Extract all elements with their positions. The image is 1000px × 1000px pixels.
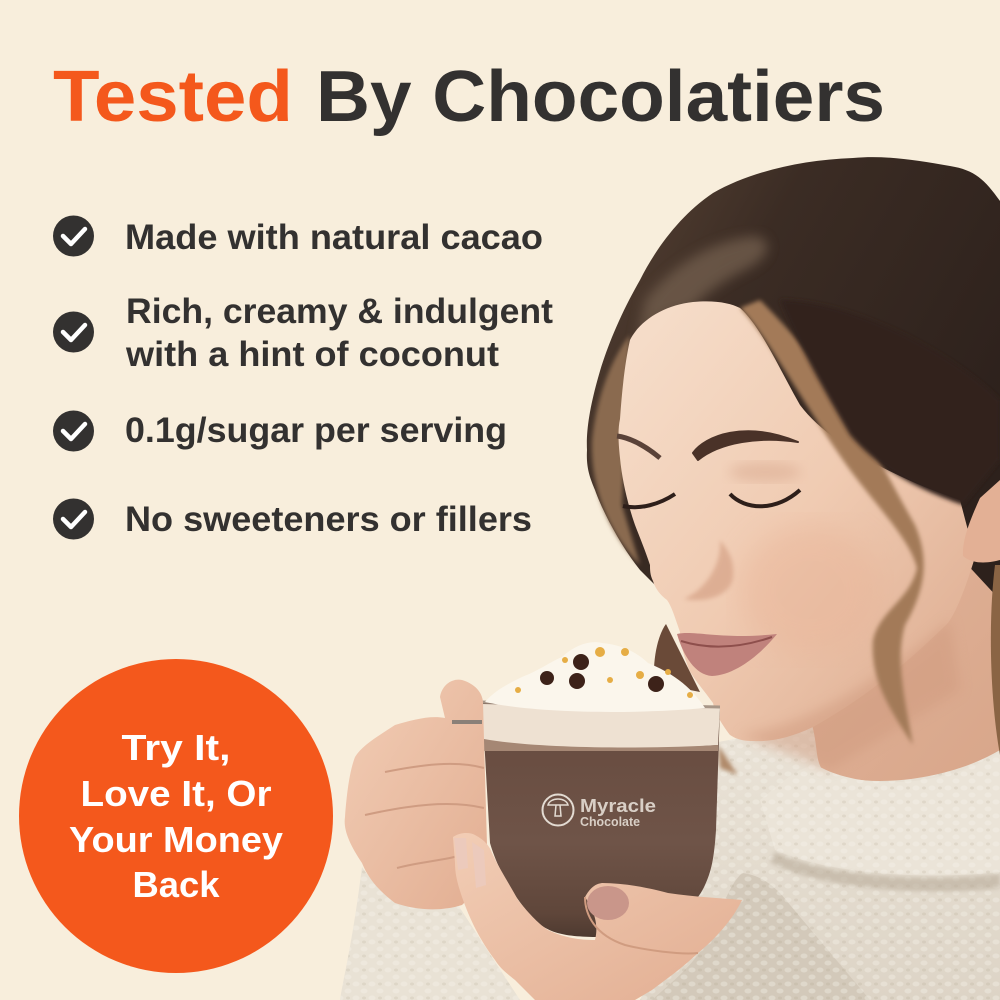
eyebrow right xyxy=(693,431,798,460)
hair strand: light wave over face xyxy=(740,300,924,745)
ear xyxy=(963,480,1000,562)
chocolate chips xyxy=(540,654,664,692)
cheek shading xyxy=(740,525,880,655)
front hand xyxy=(453,833,742,1000)
mug handle xyxy=(452,720,482,724)
thumb edge xyxy=(585,897,698,953)
benefit: natural cacao: Made with natural cacao xyxy=(125,218,543,257)
badge: guarantee: Love It, Or xyxy=(80,773,272,814)
mug logo: Myracle xyxy=(580,796,656,816)
benefit list xyxy=(53,216,553,540)
eye socket shading xyxy=(729,462,801,482)
hair behind chin xyxy=(654,624,700,692)
dark hair over temple xyxy=(780,300,1000,505)
fingernails xyxy=(454,838,486,888)
benefit: rich and creamy xyxy=(53,292,553,374)
badge: guarantee xyxy=(19,659,333,973)
jaw shadow xyxy=(740,620,960,770)
benefit: no sweeteners: No sweeteners or fillers xyxy=(125,500,532,539)
whipped cream xyxy=(485,642,705,712)
far right strand xyxy=(991,565,1000,755)
benefit: rich and creamy: with a hint of coconut xyxy=(125,335,499,374)
collar shadow xyxy=(770,852,1000,891)
right sleeve xyxy=(652,873,870,1000)
mug rim xyxy=(481,702,720,707)
hair highlight at part xyxy=(636,236,767,345)
gold sprinkles xyxy=(515,647,693,698)
mug logo: Chocolate xyxy=(580,814,640,829)
title xyxy=(53,57,885,137)
finger lines xyxy=(365,764,484,868)
mug logo xyxy=(542,794,656,829)
sweater collar xyxy=(760,752,1000,876)
face xyxy=(618,301,975,741)
badge: guarantee: Try It, xyxy=(122,727,230,768)
photo: woman with mug xyxy=(340,157,1000,1000)
badge: guarantee: Your Money xyxy=(69,819,283,860)
torso sweater xyxy=(640,725,1000,1000)
thumbnail xyxy=(587,886,629,920)
left sleeve xyxy=(340,867,520,1000)
nose shadow xyxy=(684,540,733,600)
hair wisp at collar xyxy=(718,745,738,775)
benefit: rich and creamy: Rich, creamy & indulgent xyxy=(126,292,553,331)
hair highlight left side xyxy=(592,335,640,565)
left hand fist xyxy=(345,680,488,909)
badge: guarantee: Back xyxy=(132,864,220,905)
benefit: sugar: 0.1g/sugar per serving xyxy=(125,411,507,450)
lips xyxy=(677,633,777,676)
hair mass xyxy=(587,157,1000,600)
right eyelid xyxy=(730,490,800,506)
neck xyxy=(780,520,1000,781)
eyebrow left xyxy=(617,436,660,458)
mug xyxy=(482,702,720,937)
mug foam band xyxy=(482,704,720,749)
title: Tested xyxy=(53,57,293,137)
left eyelid xyxy=(623,494,675,507)
title: By Chocolatiers xyxy=(316,57,885,137)
